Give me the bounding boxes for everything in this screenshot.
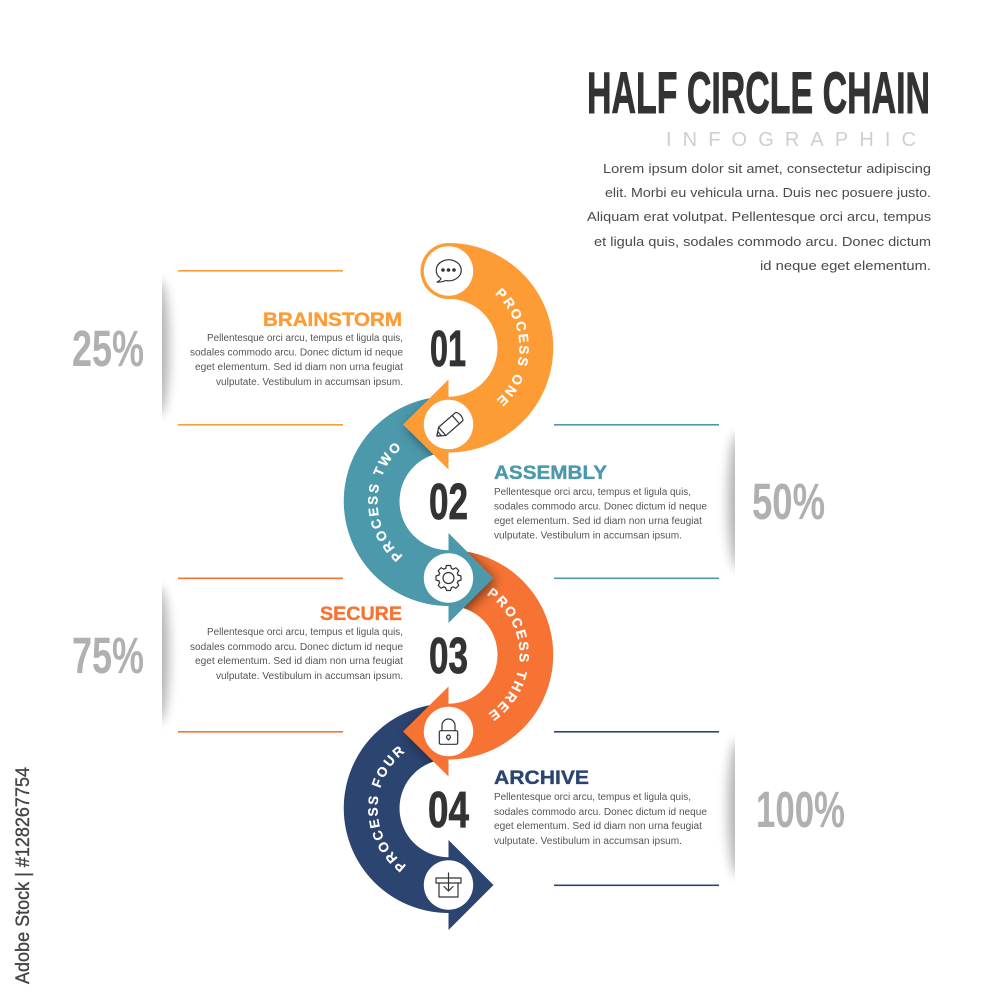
percentage 25%: 25% — [72, 320, 144, 377]
text: secure: vulputate. Vestibulum in accumsan ipsum. — [216, 671, 403, 682]
text: secure: eget elementum. Sed id diam non urna feugiat — [195, 656, 403, 667]
intro text block: Aliquam erat volutpat. Pellentesque orci arcu, tempus — [587, 209, 931, 224]
percentage 100%: 100% — [756, 781, 845, 838]
stock credit: Adobe Stock | #128267754 — [13, 767, 34, 984]
text: secure: Pellentesque orci arcu, tempus et ligula quis, — [207, 627, 403, 638]
arc: process two — [344, 398, 501, 623]
text: assembly: vulputate. Vestibulum in accumsan ipsum. — [494, 530, 682, 542]
text: assembly: sodales commodo arcu. Donec dictum id neque — [494, 502, 707, 512]
intro text block: Lorem ipsum dolor sit amet, consectetur adipiscing — [603, 161, 931, 176]
percentage 50%: 50% — [752, 473, 825, 530]
panel: assembly — [494, 424, 825, 579]
text: archive — [494, 792, 707, 847]
icon: pencil — [433, 411, 464, 440]
text: brainstorm: sodales commodo arcu. Donec dictum id neque — [190, 348, 403, 358]
icon: gear — [436, 566, 461, 590]
panel: secure — [72, 578, 403, 733]
text: assembly: eget elementum. Sed id diam non urna feugiat — [494, 516, 702, 527]
icon: speech bubble — [436, 260, 461, 282]
number 04: 04 — [428, 781, 469, 838]
heading: archive: ARCHIVE — [494, 768, 589, 789]
text: archive: Pellentesque orci arcu, tempus et ligula quis, — [494, 792, 691, 803]
curved label: process two: PROCESS TWO — [368, 443, 402, 562]
text: secure — [190, 627, 403, 682]
text: assembly — [494, 487, 707, 542]
panel: brainstorm — [72, 270, 403, 426]
text: brainstorm: Pellentesque orci arcu, tempus et ligula quis, — [207, 333, 403, 344]
intro text block: elit. Morbi eu vehicula urna. Duis nec posuere justo. — [605, 185, 931, 200]
number 01: 01 — [430, 320, 466, 377]
icon: archive box — [436, 873, 461, 897]
heading: brainstorm: BRAINSTORM — [263, 310, 402, 331]
intro text block: et ligula quis, sodales commodo arcu. Donec dictum — [594, 234, 931, 249]
text: assembly: Pellentesque orci arcu, tempus et ligula quis, — [494, 487, 691, 498]
arc: process one — [402, 243, 554, 470]
text: brainstorm — [190, 333, 403, 388]
text: secure: sodales commodo arcu. Donec dictum id neque — [190, 642, 403, 653]
arc: process three — [403, 552, 554, 776]
intro text block: id neque eget elementum. — [760, 258, 931, 273]
arc: process four — [344, 705, 494, 930]
number 02: 02 — [429, 473, 468, 530]
intro text block — [587, 161, 931, 273]
text: archive: sodales commodo arcu. Donec dictum id neque — [494, 807, 707, 818]
panel: archive — [494, 731, 845, 886]
curved label: process three: PROCESS THREE — [487, 588, 529, 721]
heading: assembly: ASSEMBLY — [494, 463, 607, 484]
icon: padlock — [439, 719, 458, 744]
number 03: 03 — [429, 627, 468, 684]
text: brainstorm: eget elementum. Sed id diam non urna feugiat — [195, 362, 403, 373]
subtitle: INFOGRAPHIC — [666, 129, 916, 151]
curved label: process four: PROCESS FOUR — [368, 746, 406, 872]
curved label: process one: PROCESS ONE — [495, 288, 529, 406]
heading: secure: SECURE — [320, 604, 402, 625]
text: brainstorm: vulputate. Vestibulum in accumsan ipsum. — [216, 377, 403, 388]
text: archive: vulputate. Vestibulum in accumsan ipsum. — [494, 836, 682, 847]
text: archive: eget elementum. Sed id diam non urna feugiat — [494, 821, 702, 832]
percentage 75%: 75% — [72, 627, 144, 684]
